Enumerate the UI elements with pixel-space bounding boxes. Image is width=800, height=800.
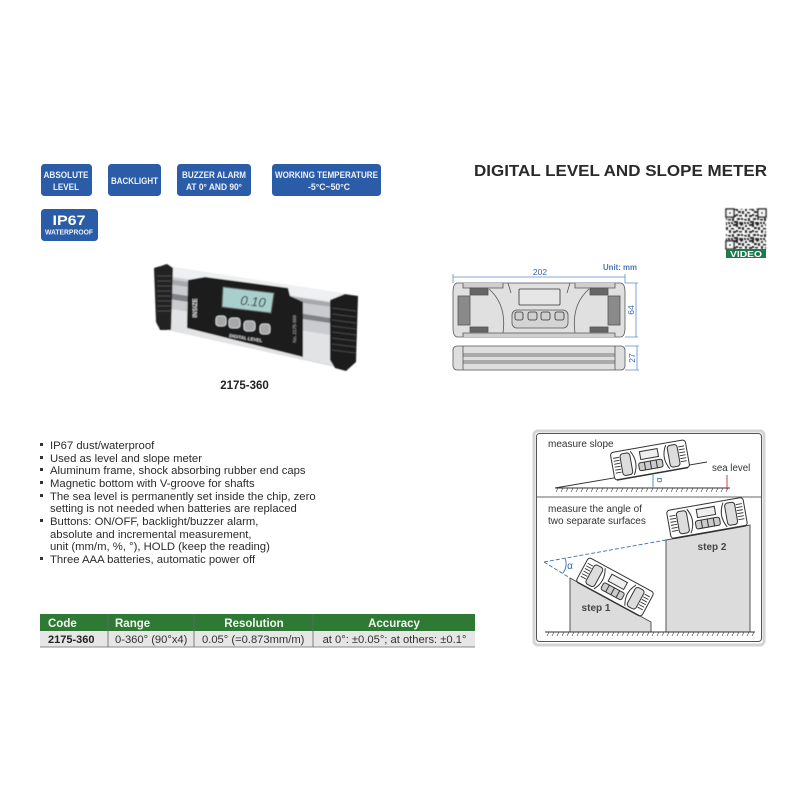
badge: IP67 waterproof: WATERPROOF xyxy=(45,228,93,236)
badge: absolute level: ABSOLUTE xyxy=(44,170,88,180)
table row: 0.05° (=0.873mm/m) xyxy=(202,634,305,646)
feature list: Used as level and slope meter xyxy=(50,453,202,465)
unit label: Unit: mm xyxy=(603,263,637,272)
feature list: Buttons: ON/OFF, backlight/buzzer alarm, xyxy=(50,516,258,528)
alpha label: α xyxy=(567,561,573,572)
side view xyxy=(453,346,625,370)
device label: DIGITAL LEVEL xyxy=(229,333,263,343)
slope and ground xyxy=(555,462,730,488)
icon: level on step 2 xyxy=(666,497,748,539)
badge: absolute level: LEVEL xyxy=(53,182,79,192)
product code: 2175-360 xyxy=(220,380,269,392)
badge: working temperature xyxy=(272,164,381,196)
feature list xyxy=(40,440,316,566)
LCD reading: 0.10 xyxy=(240,293,267,310)
step 1 block xyxy=(570,578,651,632)
badge: working temperature: -5°C~50°C xyxy=(308,182,350,192)
table header: Code xyxy=(48,618,77,630)
angle arc xyxy=(563,558,566,573)
aluminum body xyxy=(158,265,353,368)
product photo: digital level xyxy=(154,264,358,371)
icon: level on slope xyxy=(610,440,690,480)
dimension 27: 27 xyxy=(627,353,637,363)
dashed angle lines xyxy=(544,540,666,578)
dimension 64: 64 xyxy=(626,305,636,315)
table header: Accuracy xyxy=(368,618,420,630)
feature badges xyxy=(41,164,381,241)
feature list: Three AAA batteries, automatic power off xyxy=(50,554,256,566)
brand mark: INSIZE xyxy=(193,298,199,318)
table header: Range xyxy=(115,618,150,630)
specification table xyxy=(40,614,475,647)
feature list: Magnetic bottom with V-groove for shafts xyxy=(50,478,255,490)
QR code with video label: VIDEO xyxy=(730,249,762,259)
title: DIGITAL LEVEL AND SLOPE METER xyxy=(474,163,767,180)
label: step 2: step 2 xyxy=(698,542,727,553)
QR code with video label xyxy=(726,209,766,259)
table header: Resolution xyxy=(224,618,284,630)
control buttons xyxy=(216,316,270,334)
badge: absolute level xyxy=(41,164,92,196)
badge: IP67 waterproof: IP67 xyxy=(52,212,86,228)
feature list: setting is not needed when batteries are replaced xyxy=(50,503,297,515)
alpha label: α xyxy=(654,477,664,483)
dimension 202: 202 xyxy=(533,267,547,277)
label: step 1: step 1 xyxy=(582,603,611,614)
LCD display xyxy=(222,287,274,313)
right rubber end cap xyxy=(330,294,358,371)
feature list: absolute and incremental measurement, xyxy=(50,529,252,541)
panel: measure two surfaces xyxy=(544,497,755,636)
table row: 2175-360 xyxy=(48,634,94,646)
dimension lines xyxy=(453,274,639,370)
sea level marker xyxy=(726,475,728,490)
left rubber end cap xyxy=(154,264,173,330)
feature list: Aluminum frame, shock absorbing rubber end caps xyxy=(50,465,306,477)
black center housing xyxy=(187,277,303,357)
icon: level on step 1 xyxy=(576,557,654,617)
table header xyxy=(40,614,475,631)
step 2 block xyxy=(666,525,750,632)
badge: buzzer alarm xyxy=(177,164,251,196)
badge: IP67 waterproof xyxy=(41,209,98,241)
badge: buzzer alarm: AT 0° AND 90° xyxy=(186,182,242,192)
label: sea level: sea level xyxy=(712,463,750,474)
label: measure slope: measure slope xyxy=(548,439,614,450)
feature list: IP67 dust/waterproof xyxy=(50,440,155,452)
table row: at 0°: ±0.05°; at others: ±0.1° xyxy=(323,634,466,646)
feature list: The sea level is permanently set inside the chip, zero xyxy=(50,491,316,503)
model number on housing: No. 2175-360 xyxy=(292,315,297,343)
badge: working temperature: WORKING TEMPERATURE xyxy=(275,170,378,180)
label: measure the angle: measure the angle of xyxy=(548,504,642,515)
technical drawing with dimensions xyxy=(453,263,639,370)
top view xyxy=(453,283,625,337)
slope angle marker xyxy=(652,475,654,488)
label: measure the angle: two separate surfaces xyxy=(548,516,646,527)
badge: buzzer alarm: BUZZER ALARM xyxy=(182,170,246,180)
panel: measure slope xyxy=(548,439,750,492)
badge: backlight: BACKLIGHT xyxy=(111,176,158,186)
ground line xyxy=(545,631,755,633)
usage diagram panel xyxy=(534,431,764,645)
table row xyxy=(40,631,475,647)
feature list: unit (mm/m, %, °), HOLD (keep the reading) xyxy=(50,541,270,553)
badge: backlight xyxy=(108,164,161,196)
table row: 0-360° (90°x4) xyxy=(115,634,188,646)
